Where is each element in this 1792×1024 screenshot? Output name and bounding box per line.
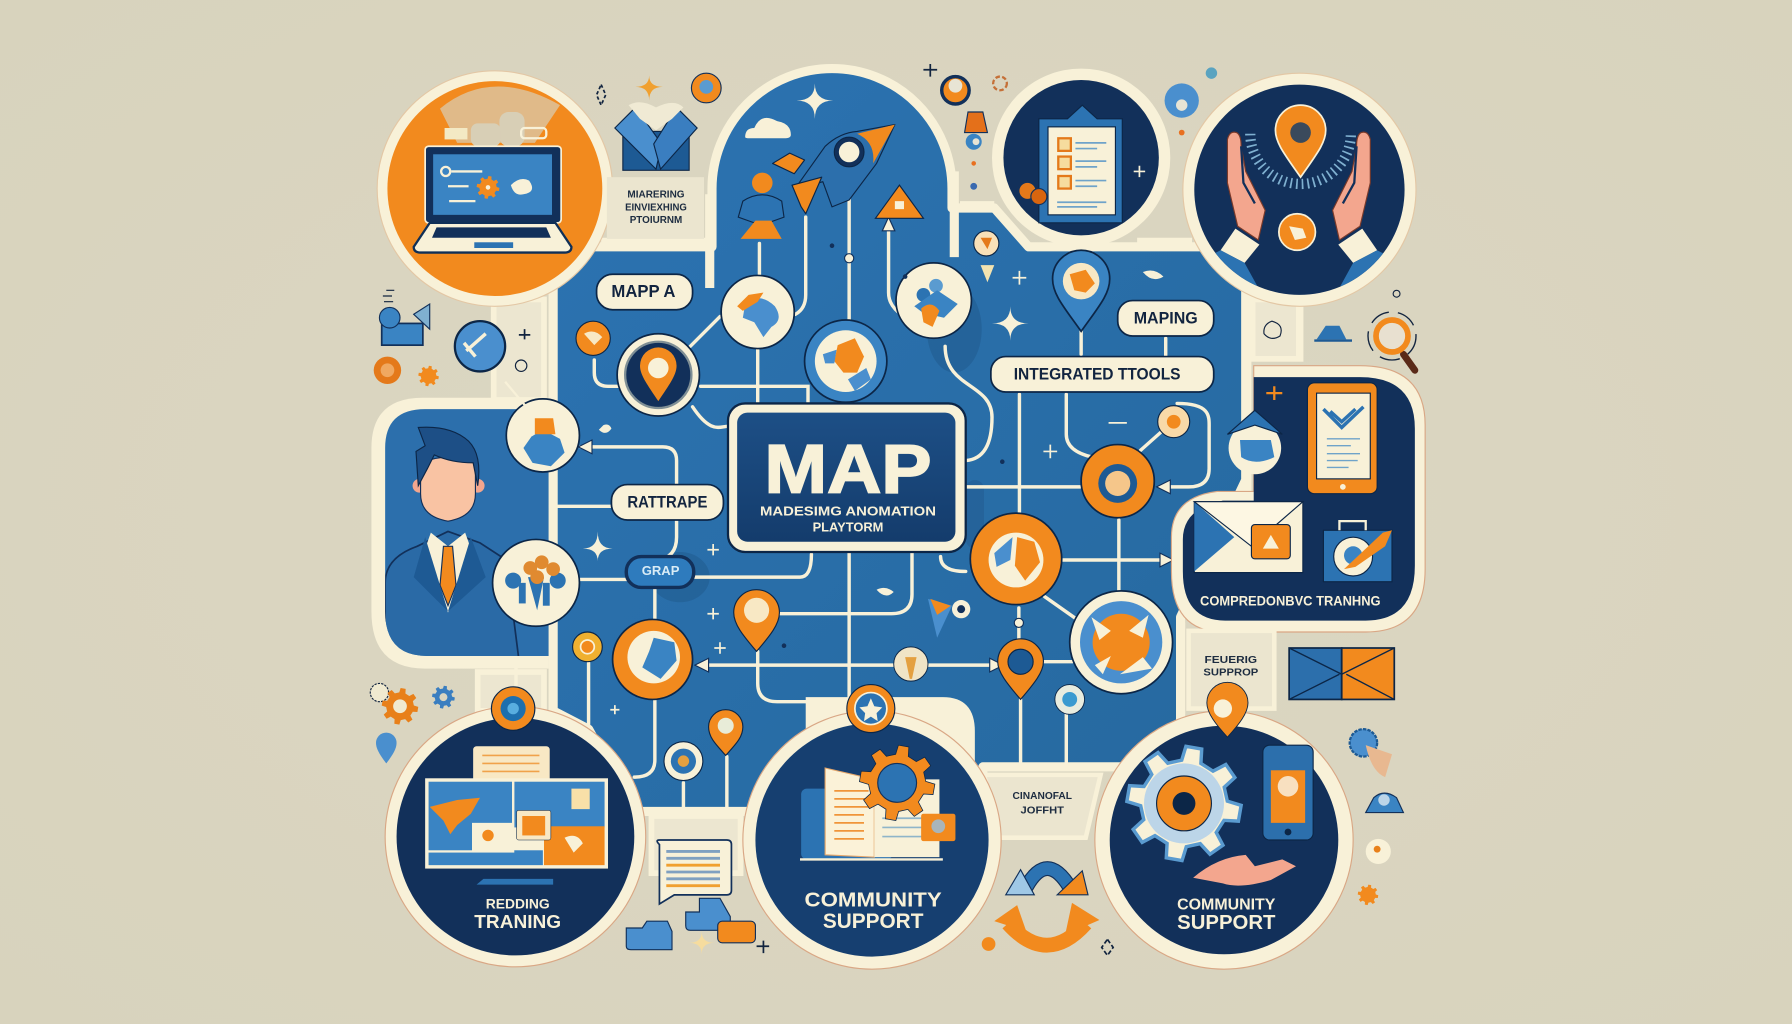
icons: top decorative	[597, 64, 1217, 190]
icon: document	[473, 746, 550, 799]
woman figure	[738, 173, 784, 239]
icon: envelope	[1194, 502, 1303, 573]
network node: orange pin right community	[1207, 682, 1248, 737]
network node: small orange top-left	[576, 321, 610, 355]
icon: phone	[1263, 745, 1313, 840]
network node: small orange near blue region	[974, 231, 999, 282]
icon: face and hair	[413, 427, 485, 521]
pill: INTEGRATED TTOOLS	[991, 357, 1214, 392]
icon: clipboard	[1019, 105, 1145, 223]
text box: channel support: JOFFHT	[1021, 806, 1064, 817]
icon: bag with target	[1323, 521, 1392, 582]
label: comprehensive training: COMPREDONBVC TRANHNG	[1200, 594, 1381, 610]
stars and sparkles	[583, 75, 1163, 714]
circle: hands holding pin	[1183, 73, 1416, 309]
icon: globe house	[1227, 410, 1282, 474]
icon: open hand	[1193, 855, 1296, 886]
central MAP box	[728, 403, 966, 552]
circle: community support right: SUPPORT	[1177, 911, 1276, 934]
pill: RATTRAPE: RATTRAPE	[627, 492, 707, 511]
panel: central blue network map	[553, 69, 1247, 811]
text box: channel support	[984, 775, 1101, 838]
circle: clipboard checklist	[992, 69, 1170, 247]
circle: reading training: TRANING	[474, 911, 561, 932]
circle: reading training	[385, 706, 646, 967]
pill: MAPP A	[597, 274, 693, 310]
pill: RATTRAPE	[611, 485, 723, 520]
warning triangle	[875, 185, 923, 218]
central MAP box: PLAYTORM	[813, 519, 883, 534]
pill: MAPING	[1118, 301, 1214, 336]
text box: marketing platform note: MIARERING	[627, 190, 685, 201]
icon: speech bubble	[657, 840, 731, 904]
icon: cycle arrows	[994, 869, 1099, 945]
central MAP box: MAP	[765, 431, 931, 508]
network node: location pin ring	[617, 334, 699, 416]
icons: blocks	[626, 898, 755, 950]
text box: channel support: CINANOFAL	[1013, 791, 1072, 802]
network node: orange ring reading	[491, 687, 535, 730]
icon: laptop	[414, 146, 571, 253]
text box: marketing platform note	[607, 177, 704, 239]
circle: reading training: REDDING	[486, 897, 550, 913]
text box: feedback support	[1189, 631, 1274, 709]
network node: orange globe left	[613, 619, 693, 699]
icon: open book	[800, 768, 943, 859]
network node: small orange pin	[709, 710, 743, 755]
pill: GRAP	[626, 557, 694, 587]
network node: small orange right	[1158, 406, 1190, 438]
network node: orange ring hub	[1081, 445, 1154, 518]
circle: community support centre: SUPPORT	[823, 908, 924, 933]
network node: globe blue	[805, 320, 887, 402]
network node: blue dot	[1055, 685, 1085, 714]
network node: big orange-blue globe	[1070, 591, 1173, 694]
connector arrowheads	[509, 217, 1306, 757]
circle: community support right: COMMUNITY	[1177, 897, 1276, 914]
network node: group of people	[493, 539, 579, 626]
icon: split envelope	[1289, 648, 1394, 699]
icon: gear	[859, 745, 955, 841]
icon: location pin	[1275, 105, 1326, 177]
icon: left hand	[1216, 132, 1266, 286]
circle: community support centre: COMMUNITY	[805, 889, 942, 911]
pill: MAPP A: MAPP A	[611, 281, 675, 301]
cloud	[745, 118, 791, 138]
network node: small orange ring	[573, 632, 602, 662]
connector lines	[503, 193, 1298, 808]
network node: people cluster	[896, 263, 971, 338]
panel: person	[371, 398, 549, 669]
icon: tablet	[1307, 383, 1377, 494]
network node: blue map pin	[1053, 250, 1110, 331]
central MAP box: MADESIMG ANOMATION	[760, 503, 936, 518]
network node: large orange globe	[970, 513, 1062, 605]
pill: GRAP: GRAP	[642, 564, 679, 578]
icon: open envelope top	[615, 102, 697, 170]
network node: world map	[721, 275, 794, 349]
network node: orange pin centre	[734, 590, 779, 651]
network node: orange pin right	[998, 639, 1043, 699]
icons: left decorative	[370, 290, 530, 763]
panel: small cream side panes	[478, 299, 1301, 873]
icon: large gear	[1127, 746, 1241, 861]
icon: plus and sparkle bottom	[689, 931, 1113, 955]
network node: mini rocket	[928, 599, 970, 638]
circle: community support centre	[743, 711, 1001, 969]
network node: bulb	[894, 647, 928, 681]
icons: right decorative	[1264, 290, 1416, 905]
network node: star badge	[847, 685, 895, 733]
panel: right navy tablet and mail	[1171, 366, 1425, 632]
circle: laptop on orange	[377, 71, 613, 306]
rocket	[773, 125, 895, 214]
text box: marketing platform note: PTOIURNM	[630, 215, 682, 226]
text box: feedback support: FEUERIG	[1205, 655, 1257, 666]
network node: person top	[505, 382, 579, 472]
icon: right hand	[1332, 132, 1384, 286]
icon: orange badge	[1279, 214, 1315, 250]
text box: feedback support: SUPPROP	[1203, 667, 1259, 678]
network node: small ring	[664, 742, 703, 781]
pill: MAPING: MAPING	[1134, 308, 1198, 327]
pill: INTEGRATED TTOOLS: INTEGRATED TTOOLS	[1014, 364, 1181, 383]
circle: community support right	[1095, 711, 1353, 969]
text box: marketing platform note: EINVIEXHING	[625, 202, 687, 213]
icon: map screens	[425, 778, 608, 869]
